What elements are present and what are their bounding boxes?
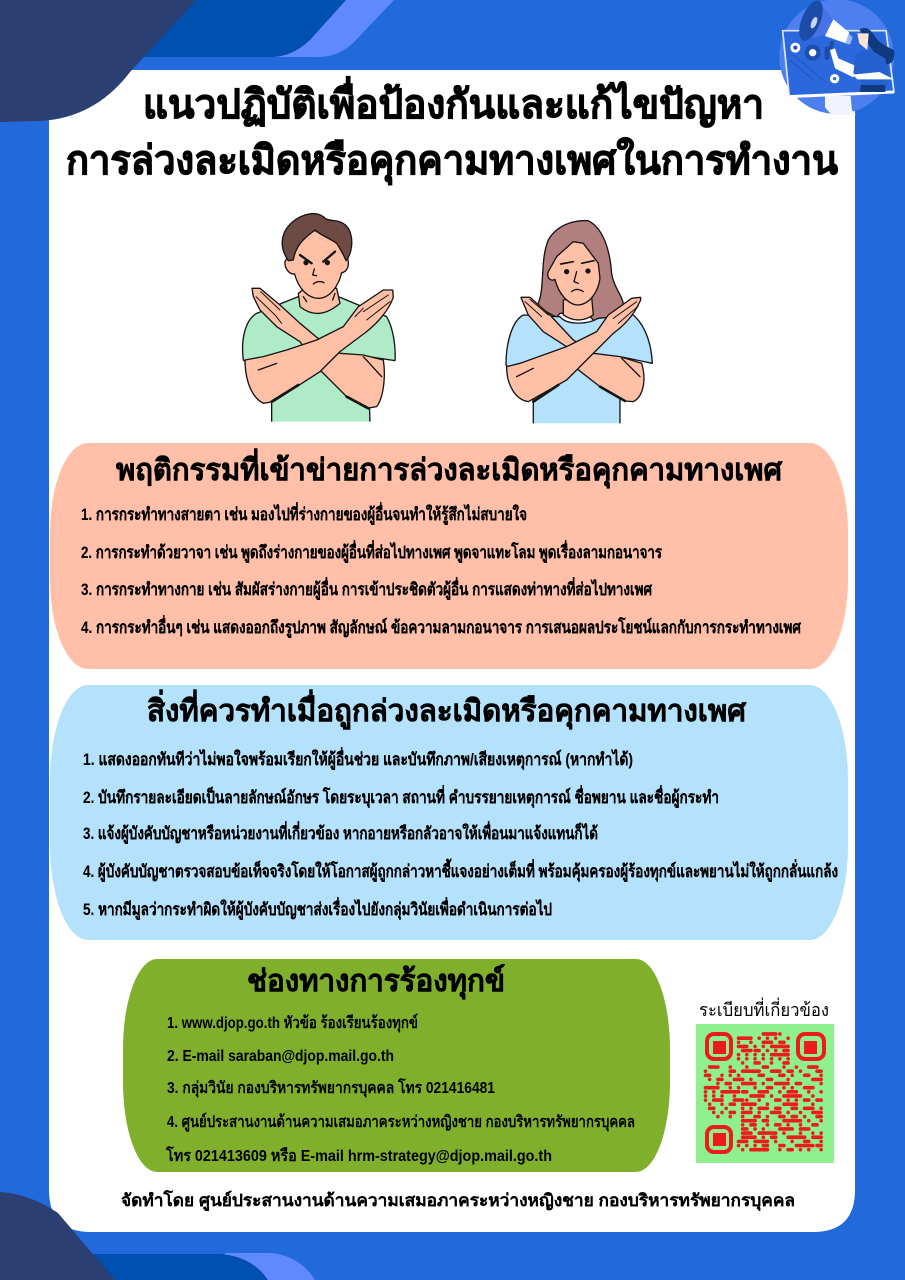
illustration: woman crossing arms — [506, 221, 652, 428]
heading: complaint channels: ช่องทางการร้องทุกข์ — [247, 964, 505, 1000]
heading: behaviours: พฤติกรรมที่เข้าข่ายการล่วงละเมิดหรือคุกคามทางเพศ — [116, 448, 783, 489]
title — [66, 76, 838, 186]
footer credit: จัดทำโดย ศูนย์ประสานงานด้านความเสมอภาคระหว่างหญิงชาย กองบริหารทรัพยากรบุคคล — [121, 1190, 795, 1212]
panel: behaviours: 3. การกระทำทางกาย เช่น สัมผัสร่างกายผู้อื่น การเข้าประชิดตัวผู้อื่น การแสดงท่าทางที่ส่อไปทางเพศ — [81, 577, 653, 601]
panel: behaviours: 2. การกระทำด้วยวาจา เช่น พูดถึงร่างกายของผู้อื่นที่ส่อไปทางเพศ พูดจาแทะโลม พูดเรื่องลามกอนาจาร — [81, 540, 663, 564]
illustration: man crossing arms — [243, 214, 395, 426]
panel: complaint channels: 4. ศูนย์ประสานงานด้านความเสมอภาคระหว่างหญิงชาย กองบริหารทรัพยากรบุคคล — [167, 1112, 635, 1133]
panel: behaviours: 1. การกระทำทางสายตา เช่น มองไปที่ร่างกายของผู้อื่นจนทำให้รู้สึกไม่สบายใจ — [81, 502, 527, 526]
panel: what to do — [50, 685, 848, 940]
title: การล่วงละเมิดหรือคุกคามทางเพศในการทำงาน — [66, 137, 838, 186]
panel: what to do: 5. หากมีมูลว่ากระทำผิดให้ผู้บังคับบัญชาส่งเรื่องไปยังกลุ่มวินัยเพื่อดำเนินการต่อไป — [83, 897, 552, 921]
label: related regulations: ระเบียบที่เกี่ยวข้อง — [699, 997, 829, 1020]
panel: complaint channels: 3. กลุ่มวินัย กองบริหารทรัพยากรบุคคล โทร 021416481 — [167, 1077, 495, 1098]
top-left decorative shapes — [0, 0, 394, 122]
heading: what to do: สิ่งที่ควรทำเมื่อถูกล่วงละเมิดหรือคุกคามทางเพศ — [147, 689, 747, 730]
panel: complaint channels — [123, 959, 670, 1172]
QR code — [696, 1024, 834, 1163]
panel: what to do: 2. บันทึกรายละเอียดเป็นลายลักษณ์อักษร โดยระบุเวลา สถานที่ คำบรรยายเหตุการณ์ ชื่อพยาน และชื่อผู้กระทำ — [83, 785, 719, 809]
icon: woman with megaphone and monitor — [779, 0, 894, 115]
panel: complaint channels: โทร 021413609 หรือ E-mail hrm-strategy@djop.mail.go.th — [165, 1145, 552, 1165]
panel: what to do: 3. แจ้งผู้บังคับบัญชาหรือหน่วยงานที่เกี่ยวข้อง หากอายหรือกลัวอาจให้เพื่อนมาแจ้งแทนก็ได้ — [83, 821, 598, 845]
panel: what to do: 1. แสดงออกทันทีว่าไม่พอใจพร้อมเรียกให้ผู้อื่นช่วย และบันทึกภาพ/เสียงเหตุการณ์ (หากทำได้) — [83, 747, 633, 771]
panel: behaviours — [50, 443, 848, 669]
bottom-left decorative shapes — [0, 1192, 315, 1280]
panel: complaint channels: 2. E-mail saraban@djop.mail.go.th — [167, 1048, 394, 1065]
title: แนวปฏิบัติเพื่อป้องกันและแก้ไขปัญหา — [143, 76, 764, 128]
panel: complaint channels: 1. www.djop.go.th หัวข้อ ร้องเรียนร้องทุกข์ — [167, 1013, 418, 1033]
